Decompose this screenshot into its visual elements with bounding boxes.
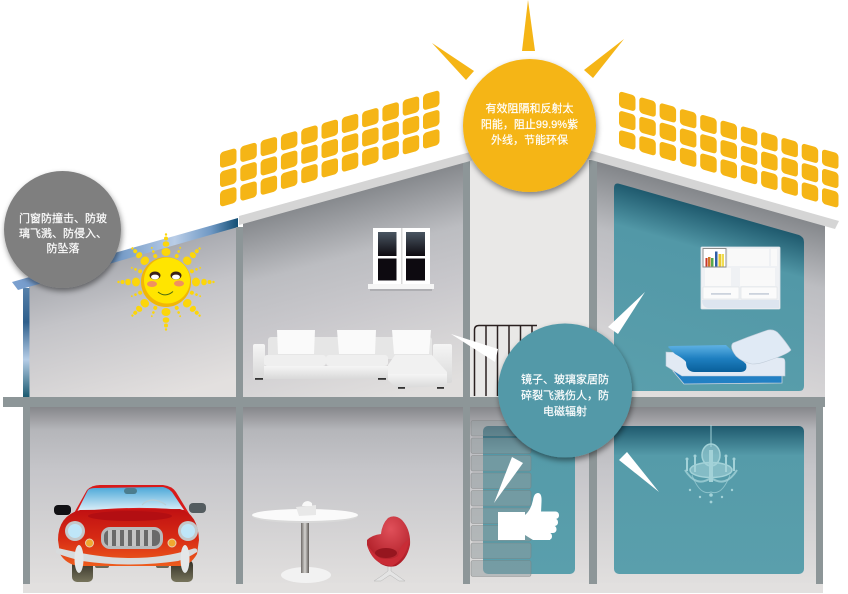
wall cabinet: [701, 247, 780, 309]
chandelier: [685, 425, 737, 503]
callout: grey safety circle: 璃飞溅、防侵入、: [19, 226, 107, 240]
middle room wall: [470, 150, 589, 397]
staircase railing: [474, 326, 537, 396]
stair teal panel: [483, 426, 575, 574]
callout: grey safety circle: [4, 171, 121, 288]
icon: thumbs up: [498, 493, 559, 540]
solar panel grid left: [220, 90, 440, 207]
left annex blue glass wall strip: [23, 288, 30, 397]
callout: orange sun circle: 有效阻隔和反射太: [486, 101, 574, 115]
bed: [666, 330, 791, 384]
callout: orange sun circle: [463, 59, 596, 192]
wall columns: [23, 160, 823, 584]
sun callout rays: [432, 0, 624, 80]
callout: teal home circle: 碎裂飞溅伤人，防: [521, 388, 609, 402]
window: [368, 228, 434, 291]
callout: orange sun circle: 阳能，阻止99.9%紫: [481, 117, 578, 131]
callout: teal home circle: 镜子、玻璃家居防: [521, 372, 609, 386]
lower storey walls: [23, 407, 823, 584]
lower right teal panel: [614, 426, 804, 574]
left annex blue glass roof: [12, 218, 238, 290]
callout: grey safety circle: 门窗防撞击、防玻: [19, 211, 107, 225]
icon: smiling cartoon sun: [117, 233, 215, 331]
floor slab: [3, 397, 825, 407]
roof band right: [528, 133, 839, 229]
right upper room wall: [597, 158, 825, 397]
callout: orange sun circle: 外线，节能环保: [491, 132, 568, 146]
table: [252, 501, 358, 583]
main left room wall: [243, 159, 463, 397]
left annex room wall: [29, 224, 236, 397]
callout: grey safety circle: 防坠落: [46, 241, 80, 255]
staircase steps: [471, 420, 531, 576]
egg chair: [367, 516, 410, 581]
solar panel grid right: [619, 91, 838, 208]
upper right teal panel: [614, 184, 804, 391]
callout: teal home circle: [498, 324, 632, 458]
sofa: [253, 330, 452, 389]
callout: teal home circle: 电磁辐射: [543, 404, 587, 418]
car: [54, 485, 206, 582]
ground strip: [23, 583, 823, 593]
roof band left: [239, 136, 528, 225]
white pointer wedges: [451, 292, 659, 503]
